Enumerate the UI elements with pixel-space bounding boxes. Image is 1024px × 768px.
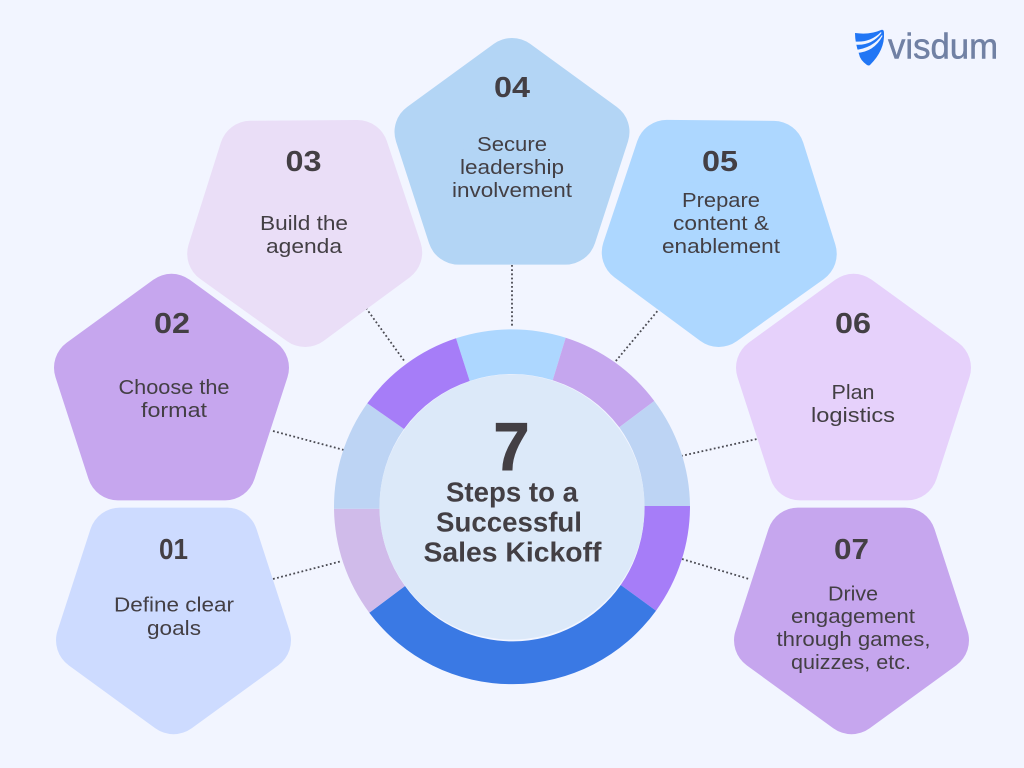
label 04 <box>452 133 572 202</box>
label 06: Plan <box>832 381 874 404</box>
label 03 <box>260 212 348 258</box>
pentagon 06 <box>767 305 940 469</box>
label 07: quizzes, etc. <box>791 651 911 674</box>
pentagon 07 <box>765 539 938 703</box>
label 07: Drive <box>828 582 878 606</box>
central circle <box>379 374 645 640</box>
label 01: goals <box>147 617 201 640</box>
label 04: involvement <box>452 179 572 202</box>
step 01: define clear goals <box>87 534 260 703</box>
step 05: prepare content and enablement <box>632 146 807 317</box>
label 05: Prepare <box>682 189 760 212</box>
central title: 7 <box>494 409 530 485</box>
label 03: agenda <box>266 235 343 258</box>
step 07: drive engagement <box>765 534 938 703</box>
number 02: 02 <box>154 308 190 340</box>
label 07: engagement <box>791 605 915 628</box>
label 05: content & <box>673 212 769 235</box>
label 01: Define clear <box>114 594 234 616</box>
central title: Steps to a <box>446 476 579 508</box>
wordmark: visdum <box>888 26 998 66</box>
label 07: through games, <box>776 628 930 651</box>
pentagon 01 <box>87 539 260 703</box>
number 04: 04 <box>494 72 530 104</box>
number 03: 03 <box>286 146 322 178</box>
icon: shield <box>854 30 884 66</box>
label 06 <box>811 381 895 427</box>
label 02: Choose the <box>118 376 230 399</box>
label 05 <box>662 189 780 258</box>
central title <box>424 409 602 568</box>
pentagon 03 <box>217 151 392 317</box>
step 02: choose the format <box>85 305 258 469</box>
step 03: build the agenda <box>217 146 392 317</box>
pentagon 02 <box>85 305 258 469</box>
central title: Sales Kickoff <box>424 536 602 568</box>
pentagon 04 <box>426 69 598 234</box>
central title: Successful <box>436 506 582 538</box>
label 06: logistics <box>811 404 895 427</box>
label 03: Build the <box>260 212 348 235</box>
label 02 <box>118 376 230 422</box>
label 02: format <box>141 399 207 422</box>
number 06: 06 <box>835 308 871 340</box>
number 01: 01 <box>159 534 188 566</box>
step 04: secure leadership involvement <box>426 69 598 234</box>
central ring of seven segments <box>334 329 690 684</box>
connector lines <box>273 265 757 579</box>
label 07 <box>776 582 930 674</box>
label 01 <box>114 594 234 640</box>
step 06: plan logistics <box>767 305 940 469</box>
label 04: leadership <box>460 156 564 179</box>
number 05: 05 <box>702 146 738 178</box>
logo: visdum <box>854 26 998 66</box>
pentagon 05 <box>632 151 807 317</box>
label 05: enablement <box>662 235 780 258</box>
label 04: Secure <box>477 133 547 156</box>
number 07: 07 <box>834 534 869 566</box>
